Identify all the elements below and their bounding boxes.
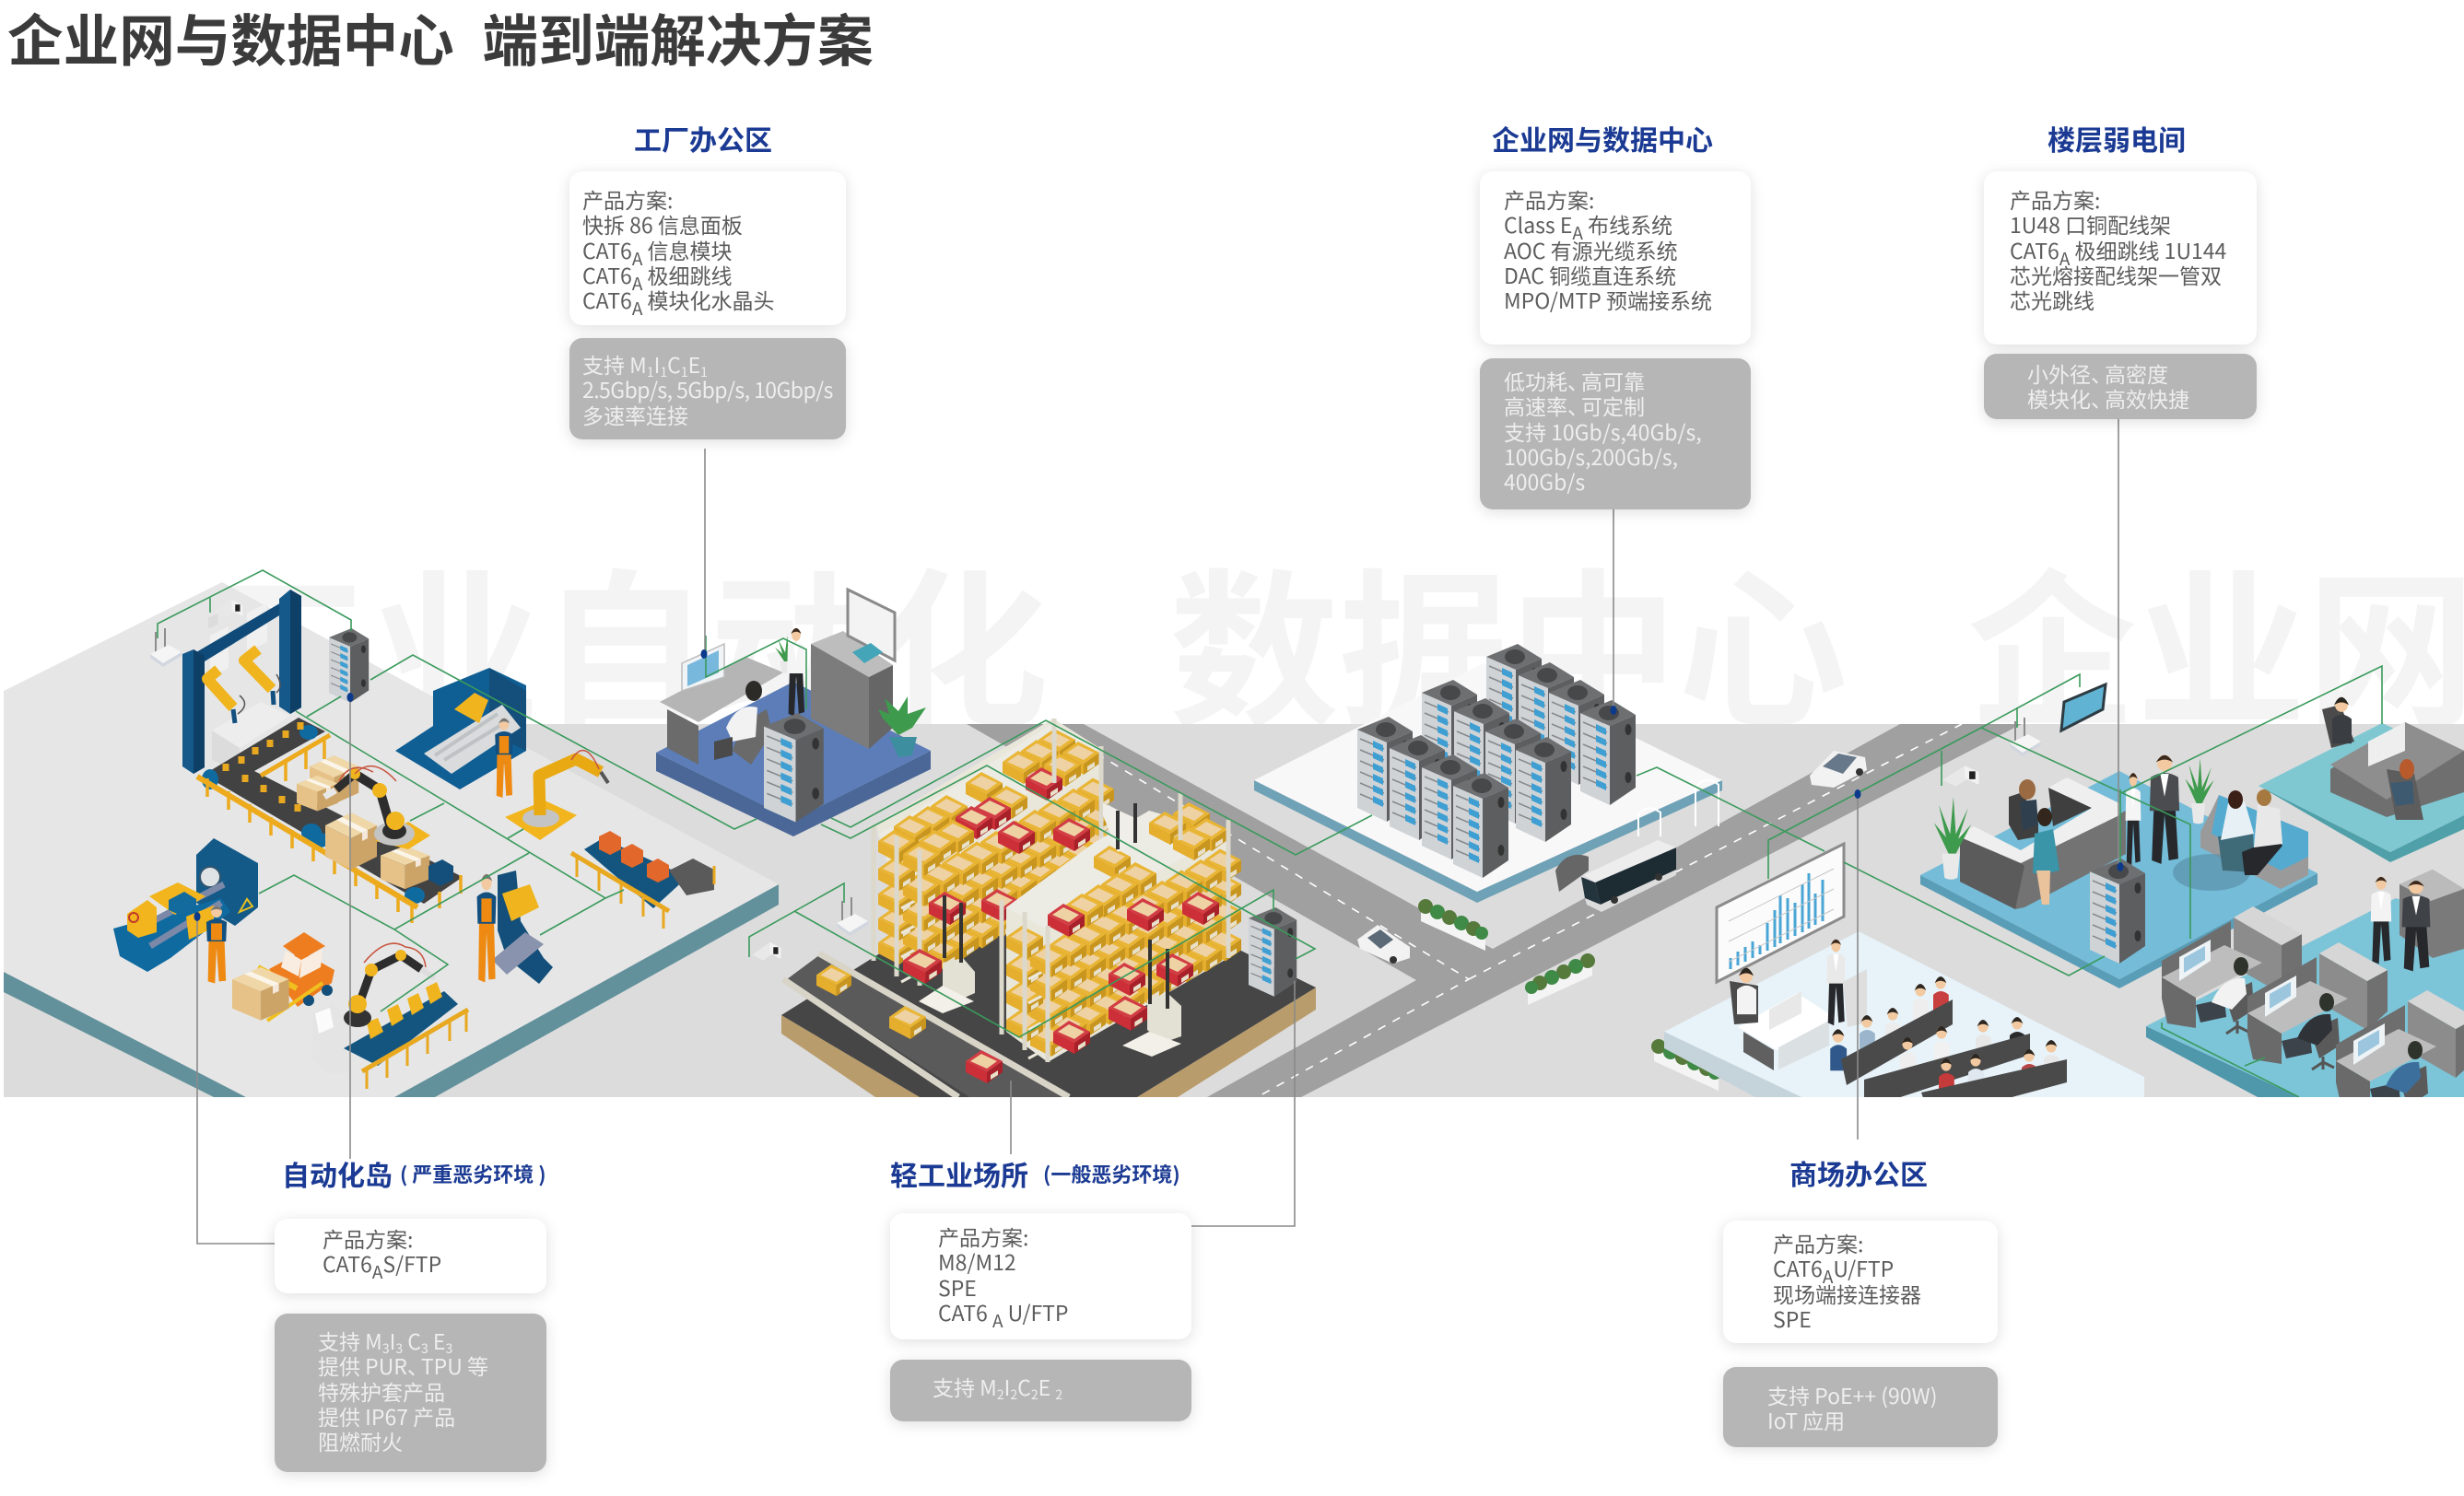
background watermark text: 工业自动化 <box>201 516 1049 761</box>
plate: data centre <box>1254 663 1722 903</box>
product card: automation island: 产品方案: <box>323 1222 413 1254</box>
feature card: automation island: 提供 PUR、TPU 等 <box>318 1350 488 1381</box>
product card: floor wiring closet: 产品方案: <box>2010 183 2100 215</box>
product card: light industry: 产品方案: <box>938 1221 1028 1252</box>
gantry with robot arms <box>182 590 301 774</box>
feature card: automation island: 阻燃耐火 <box>318 1425 403 1456</box>
bus shelter and bus <box>1555 840 1676 912</box>
feature card: data centre: 支持 10Gb/s,40Gb/s, <box>1504 415 1702 447</box>
security gate arches <box>1638 780 1719 836</box>
panel: enterprise network and data centre <box>1475 118 1755 517</box>
roads <box>967 724 2022 1097</box>
plate: reception <box>1920 771 2317 988</box>
background watermark text: 数据中心 <box>1169 516 1848 761</box>
product card: floor wiring closet: 1U48 口铜配线架 <box>2010 208 2171 240</box>
product card: factory office: CAT6A 极细跳线 <box>582 259 733 296</box>
product card: factory office: 产品方案: <box>582 183 673 215</box>
plate: conference <box>1664 931 2144 1097</box>
heading: automation island: 自动化岛 <box>282 1153 393 1194</box>
connector line: light industry to rack <box>1191 981 1295 1226</box>
server rack: warehouse <box>1249 907 1297 997</box>
speaker at lectern <box>1826 940 1867 1027</box>
feature card: factory office: 多速率连接 <box>582 399 688 430</box>
car: upper road <box>1810 751 1867 788</box>
product card: factory office: 快拆 86 信息面板 <box>582 208 743 240</box>
connector line: enterprise network and data centre <box>1611 509 1616 715</box>
heading: commercial office: 商场办公区 <box>1789 1152 1928 1193</box>
product card: data centre: 产品方案: <box>1504 183 1594 215</box>
product card: data centre: DAC 铜缆直连系统 <box>1504 259 1676 290</box>
product card: factory office: CAT6A 模块化水晶头 <box>582 284 775 321</box>
data centre server racks <box>1357 644 1636 878</box>
feature card: factory office: 2.5Gbp/s, 5Gbp/s, 10Gbp/s <box>582 373 833 404</box>
product card: floor wiring closet: 芯光熔接配线架一管双 <box>2010 259 2222 290</box>
feature card: automation island <box>275 1314 546 1472</box>
panel: factory office <box>565 118 851 447</box>
heading: enterprise network and data centre: 企业网与数据中心 <box>1492 118 1713 158</box>
robot arm on yellow base <box>324 766 430 849</box>
conference desk with seated man <box>1730 968 1836 1070</box>
warehouse floor <box>781 925 1316 1097</box>
panel: light industry <box>886 1153 1196 1429</box>
warehouse stackers and scanner gate <box>903 803 1181 1057</box>
plate: factory floor <box>4 582 779 1097</box>
warehouse conveyor crates <box>816 964 1003 1083</box>
small conveyor with orange boxes <box>571 831 714 929</box>
car: road junction <box>1357 925 1410 964</box>
server rack: reception <box>2090 859 2145 964</box>
CNC machine with worker <box>395 668 526 798</box>
connector line: floor wiring closet <box>2118 419 2123 871</box>
camera, router and screen: reception <box>1935 684 2106 799</box>
feature card: data centre: 400Gb/s <box>1504 465 1585 497</box>
product card: data centre: MPO/MTP 预端接系统 <box>1504 284 1712 315</box>
feature card: automation island: 支持 M3I3 C3 E3 <box>318 1325 452 1358</box>
feature card: factory office: 支持 M1I1C1E1 <box>582 348 708 381</box>
warehouse shelving: right rack <box>1002 793 1241 1062</box>
feature card: automation island: 特殊护套产品 <box>318 1375 445 1407</box>
feature card: light industry <box>890 1360 1191 1421</box>
product card: automation island <box>275 1219 546 1293</box>
product card: floor wiring closet: 芯光跳线 <box>2010 284 2094 315</box>
connector line: factory office <box>700 449 708 659</box>
product card: factory office <box>569 171 846 325</box>
feature card: commercial office: IoT 应用 <box>1767 1404 1845 1435</box>
reception desk and staff <box>1934 777 2126 909</box>
product card: light industry: SPE <box>938 1271 977 1303</box>
audience rows <box>1830 976 2067 1105</box>
lounge: sofa, visitors, standing men <box>2126 755 2308 891</box>
panel: commercial office <box>1719 1152 2002 1455</box>
feature card: light industry: 支持 M2I2C2E 2 <box>933 1371 1062 1404</box>
product card: floor wiring closet: CAT6A 极细跳线 1U144 <box>2010 234 2226 271</box>
plate: upper right office <box>2259 723 2464 862</box>
heading: floor wiring closet: 楼层弱电间 <box>2047 118 2186 158</box>
product card: floor wiring closet <box>1984 171 2257 345</box>
product card: commercial office: 现场端接连接器 <box>1773 1278 1921 1309</box>
yellow industrial robot <box>505 751 608 840</box>
panel: floor wiring closet <box>1979 118 2261 427</box>
router and camera: factory <box>150 600 243 667</box>
feature card: factory office <box>569 338 846 439</box>
product card: automation island: CAT6AS/FTP <box>323 1247 441 1284</box>
feature card: commercial office: 支持 PoE++ (90W) <box>1767 1379 1938 1410</box>
feature card: floor wiring closet: 小外径、高密度 <box>2027 357 2168 389</box>
forklift with cargo box <box>232 932 334 1021</box>
heading: light industry: 轻工业场所 <box>890 1153 1028 1194</box>
robot cell with bottom conveyor <box>312 943 468 1089</box>
feature card: commercial office <box>1723 1367 1998 1447</box>
product card: commercial office: CAT6AU/FTP <box>1773 1252 1894 1289</box>
upper right office desks <box>2322 697 2464 820</box>
green network cabling <box>158 570 2382 1097</box>
connector line: light industry to conveyor <box>1010 1081 1012 1154</box>
feature card: floor wiring closet: 模块化、高效快捷 <box>2027 382 2189 414</box>
lower right cabinet and standing men <box>2371 870 2464 971</box>
connector line: automation island to lathe <box>194 912 275 1244</box>
product card: factory office: CAT6A 信息模块 <box>582 234 733 271</box>
drilling machine with worker <box>477 871 553 984</box>
background watermark text <box>201 516 2464 761</box>
router and camera: warehouse <box>746 897 868 971</box>
feature card: data centre <box>1480 358 1751 509</box>
product card: commercial office: 产品方案: <box>1773 1227 1863 1258</box>
server rack: factory <box>329 628 369 703</box>
feature card: data centre: 高速率、可定制 <box>1504 390 1645 421</box>
feature card: automation island: 提供 IP67 产品 <box>318 1400 455 1432</box>
feature card: floor wiring closet <box>1984 354 2257 419</box>
conveyor L-shaped <box>197 718 463 923</box>
product card: data centre <box>1480 171 1751 345</box>
cubicle workstations <box>2162 906 2464 1117</box>
isometric campus scene <box>4 582 2464 1117</box>
product card: light industry: CAT6 A U/FTP <box>938 1296 1069 1333</box>
ground band <box>4 724 2464 1097</box>
background watermark text: 企业网 <box>1967 516 2464 761</box>
heading: factory office: 工厂办公区 <box>634 118 772 158</box>
product card: light industry: M8/M12 <box>938 1245 1016 1277</box>
product card: data centre: AOC 有源光缆系统 <box>1504 234 1678 265</box>
warehouse shelving: left rack <box>874 719 1114 986</box>
subheading: automation island: ( 严重恶劣环境 ) <box>400 1159 546 1188</box>
hedges <box>1418 899 1721 1091</box>
plate: factory office <box>656 682 931 836</box>
product card: commercial office: SPE <box>1773 1303 1812 1334</box>
feature card: data centre: 100Gb/s,200Gb/s, <box>1504 440 1678 472</box>
plate: lower right office <box>2146 898 2464 1097</box>
product card: commercial office <box>1723 1221 1998 1343</box>
lathe machine with worker <box>113 838 258 984</box>
panel: automation island <box>270 1153 551 1479</box>
feature card: data centre: 低功耗、高可靠 <box>1504 365 1645 396</box>
connector line: automation island to rack <box>346 693 354 1159</box>
server rack: factory office <box>764 713 824 823</box>
subheading: light industry: (一般恶劣环境) <box>1043 1159 1180 1188</box>
presentation whiteboard chart <box>1717 844 1844 982</box>
connector line: commercial office <box>1854 789 1861 1140</box>
product card: data centre: Class EA 布线系统 <box>1504 208 1672 245</box>
product card: light industry <box>890 1213 1191 1339</box>
factory office furniture and staff <box>660 590 926 765</box>
